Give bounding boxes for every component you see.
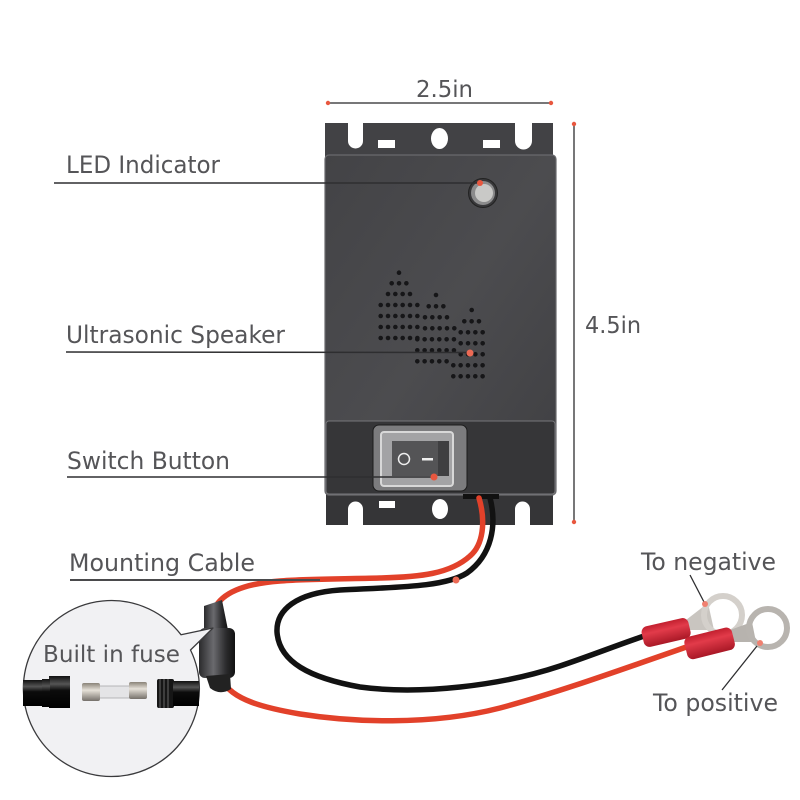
callout: to negative: To negative [640, 548, 776, 576]
callout: mounting cable: Mounting Cable [69, 549, 255, 577]
mounting cable wires [218, 498, 695, 721]
negative ring terminal [686, 596, 742, 634]
ring terminals [640, 596, 787, 660]
device: ultrasonic unit [325, 123, 556, 525]
fuse holder right half [157, 679, 199, 708]
red wire [218, 498, 695, 721]
callout: to positive [652, 640, 778, 717]
negative terminal sleeve [640, 617, 692, 648]
callout: LED indicator: LED Indicator [66, 151, 220, 179]
inline fuse holder [199, 600, 235, 692]
positive ring terminal [730, 609, 787, 647]
dimension: width [326, 77, 553, 105]
callout: switch button: Switch Button [67, 447, 230, 475]
positive terminal sleeve [683, 626, 736, 660]
ultrasonic speaker holes [381, 273, 483, 376]
switch button [373, 425, 467, 491]
callout: mounting cable [69, 549, 460, 584]
callout: LED indicator [54, 151, 483, 186]
bottom mounting plate [326, 490, 553, 525]
cable gland [463, 494, 499, 499]
height label: 4.5in [585, 313, 641, 339]
fuse holder left half [23, 676, 70, 708]
glass fuse [82, 682, 147, 701]
black wire [277, 498, 650, 690]
width label: 2.5in [416, 77, 473, 103]
LED indicator [468, 178, 498, 208]
callout: ultrasonic speaker [66, 321, 474, 356]
height line [572, 122, 576, 524]
enclosure body [325, 155, 556, 495]
callout: switch button [67, 447, 438, 480]
top mounting plate [325, 123, 553, 158]
callout: ultrasonic speaker: Ultrasonic Speaker [66, 321, 285, 349]
switch section [326, 421, 555, 494]
callout: to positive: To positive [652, 689, 778, 717]
dimension: height [572, 122, 641, 524]
width line [326, 101, 553, 105]
fuse callout label: Built in fuse [43, 642, 180, 668]
callout: built in fuse [23, 601, 213, 777]
callout: to negative [640, 548, 776, 607]
